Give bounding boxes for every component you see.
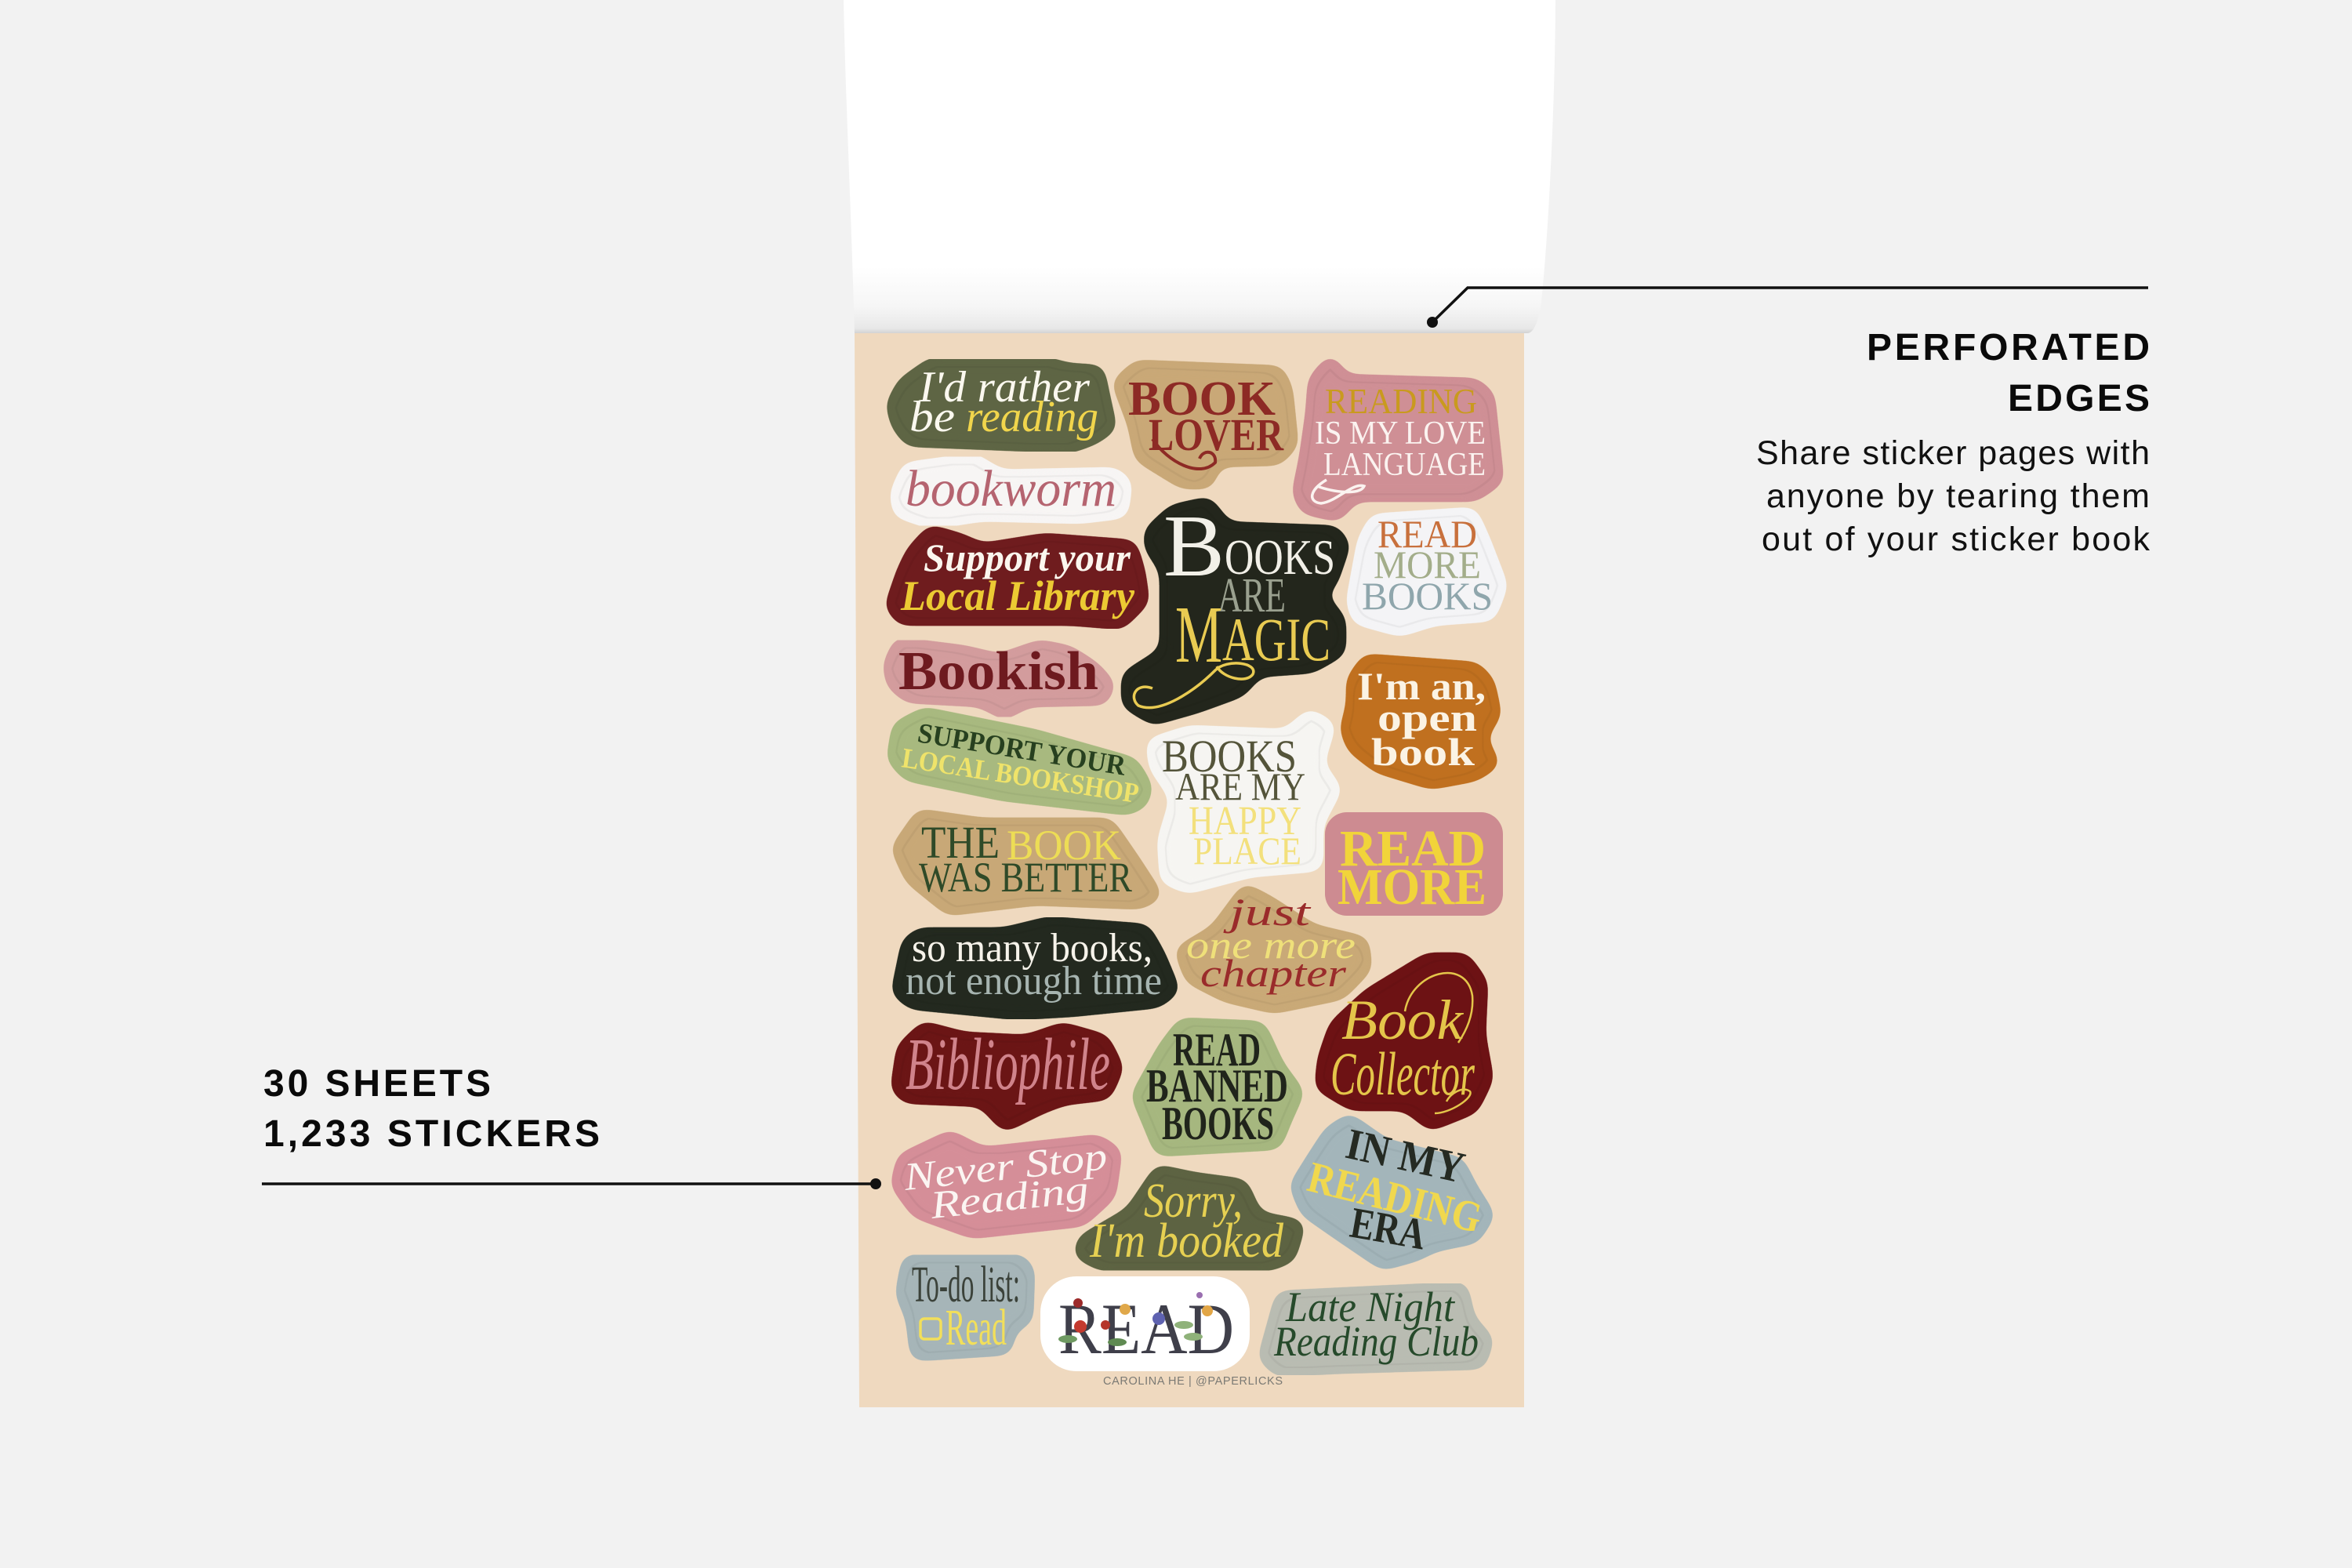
lettering bbox=[1089, 1174, 1284, 1268]
shape bbox=[1299, 1123, 1485, 1261]
lettering: READING bbox=[1303, 1152, 1486, 1243]
lettering bbox=[1146, 1024, 1288, 1149]
sticker: Late Night Reading Club bbox=[1268, 1283, 1484, 1367]
lettering: READ bbox=[1340, 820, 1486, 877]
lettering bbox=[1273, 1283, 1479, 1365]
sticker: Reading is my love language bbox=[1301, 366, 1494, 512]
lettering: IS MY LOVE bbox=[1315, 416, 1486, 452]
lettering: LANGUAGE bbox=[1323, 447, 1486, 483]
sticker: Books are magic bbox=[1131, 498, 1341, 716]
sticker: I'm an open book bbox=[1349, 663, 1492, 780]
lettering: I'm an, bbox=[1357, 664, 1486, 708]
shape bbox=[1156, 719, 1332, 884]
callout text: sheet and sticker count: 30 SHEETS bbox=[263, 1063, 491, 1105]
shape bbox=[1040, 1276, 1250, 1371]
callout text: perforated edges description: out of your sticker book bbox=[1762, 521, 2150, 558]
shape bbox=[1131, 506, 1341, 716]
lettering bbox=[1186, 890, 1356, 995]
lettering bbox=[1357, 664, 1486, 774]
lettering: so many books, bbox=[912, 926, 1152, 971]
shape bbox=[892, 647, 1105, 710]
lettering: Collector bbox=[1330, 1040, 1475, 1108]
lettering: READING bbox=[1325, 381, 1477, 421]
shape bbox=[1083, 1174, 1295, 1261]
callout text: perforated edges heading: EDGES bbox=[2008, 378, 2150, 419]
lettering: chapter bbox=[1200, 951, 1347, 995]
lettering: MORE bbox=[1374, 543, 1481, 586]
lettering: THE bbox=[921, 817, 1000, 868]
sticker: Read more bbox=[1325, 812, 1503, 916]
swash bbox=[1134, 663, 1254, 708]
lettering: To-do list: bbox=[912, 1256, 1020, 1313]
sticker: The book was better bbox=[901, 817, 1152, 906]
lettering bbox=[1315, 381, 1486, 483]
lettering bbox=[1162, 731, 1305, 873]
lettering: reading bbox=[966, 393, 1098, 441]
lettering: Read bbox=[946, 1299, 1007, 1356]
sticker sheet bbox=[855, 333, 1524, 1407]
sticker: In my reading era bbox=[1299, 1120, 1486, 1261]
callout text: perforated edges description bbox=[1756, 434, 2150, 558]
lettering: M bbox=[1175, 590, 1222, 680]
lettering: B bbox=[1163, 498, 1225, 595]
lettering bbox=[900, 717, 1141, 809]
shape bbox=[905, 1264, 1025, 1352]
callout text: perforated edges description: Share sticker pages with bbox=[1756, 434, 2150, 472]
lettering: Reading bbox=[927, 1167, 1091, 1227]
lettering: Bookish bbox=[898, 641, 1098, 702]
swash bbox=[1405, 973, 1472, 1113]
lettering: BANNED bbox=[1146, 1060, 1288, 1112]
lettering: Local Library bbox=[900, 572, 1135, 619]
torn-over white page bbox=[844, 0, 1555, 333]
lettering: ARE bbox=[1218, 569, 1286, 622]
sticker: Book Collector bbox=[1324, 962, 1484, 1121]
sticker: Read banned books bbox=[1141, 1024, 1294, 1149]
lettering: MORE bbox=[1338, 858, 1486, 916]
lettering bbox=[1128, 372, 1284, 460]
callout text: perforated edges heading bbox=[1867, 327, 2150, 419]
lettering: Sorry, bbox=[1144, 1174, 1243, 1228]
lettering: Book bbox=[1341, 989, 1465, 1051]
shape bbox=[1141, 1027, 1294, 1147]
swash bbox=[1312, 480, 1364, 503]
callout text: sheet and sticker count: 1,233 STICKERS bbox=[263, 1113, 600, 1155]
lettering: Never Stop bbox=[901, 1134, 1109, 1199]
lettering: BOOK bbox=[1128, 372, 1276, 426]
callout text: perforated edges description: anyone by tearing them bbox=[1766, 477, 2150, 515]
credit line: CAROLINA HE | @PAPERLICKS bbox=[1103, 1375, 1283, 1388]
lettering: OOKS bbox=[1225, 529, 1335, 585]
sticker: I'd rather be reading bbox=[895, 363, 1107, 444]
lettering: book bbox=[1371, 730, 1475, 774]
shape bbox=[1268, 1291, 1484, 1367]
lettering: BOOKS bbox=[1162, 1098, 1274, 1149]
flowers bbox=[1058, 1292, 1213, 1346]
shape bbox=[1301, 366, 1494, 512]
sticker: Books are my happy place bbox=[1156, 719, 1332, 884]
lettering: bookworm bbox=[906, 460, 1116, 517]
sticker: Never stop reading bbox=[900, 1134, 1112, 1229]
lettering: ERA bbox=[1347, 1199, 1429, 1260]
lettering: Late Night bbox=[1285, 1283, 1456, 1330]
shape bbox=[1356, 517, 1498, 627]
lettering: BOOKS bbox=[1162, 731, 1297, 782]
sticker: bookworm bbox=[899, 460, 1123, 520]
sticker: Bibliophile bbox=[900, 1024, 1114, 1122]
lettering bbox=[912, 1256, 1020, 1356]
lettering bbox=[900, 535, 1135, 619]
lettering: READ bbox=[1173, 1024, 1261, 1076]
lettering: READ bbox=[1377, 512, 1477, 556]
lettering: BOOK bbox=[1007, 822, 1121, 869]
shape bbox=[896, 717, 1143, 806]
lettering: one more bbox=[1186, 923, 1356, 967]
callout: sheet count leader bbox=[262, 1178, 881, 1189]
sticker: To-do list: Read bbox=[905, 1256, 1025, 1356]
lettering: not enough time bbox=[906, 959, 1162, 1004]
shape bbox=[899, 463, 1123, 520]
lettering: SUPPORT YOUR bbox=[916, 717, 1129, 782]
shape bbox=[895, 535, 1140, 620]
lettering bbox=[1362, 512, 1493, 618]
lettering bbox=[1163, 498, 1335, 680]
lettering: Reading Club bbox=[1273, 1318, 1479, 1365]
lettering: HAPPY bbox=[1189, 799, 1301, 844]
lettering bbox=[1338, 820, 1486, 916]
shape bbox=[1122, 369, 1289, 480]
shape bbox=[900, 1031, 1114, 1122]
shape bbox=[895, 367, 1107, 444]
sticker: Book Lover bbox=[1122, 369, 1289, 480]
sticker: Sorry, I'm booked bbox=[1083, 1174, 1295, 1268]
sticker: Support your local bookshop bbox=[896, 717, 1143, 809]
sticker: Support your Local Library bbox=[895, 535, 1140, 620]
shape bbox=[900, 1140, 1112, 1229]
lettering bbox=[1330, 989, 1475, 1108]
shape bbox=[901, 926, 1170, 1011]
sticker: Just one more chapter bbox=[1185, 890, 1363, 1004]
lettering bbox=[1303, 1120, 1486, 1260]
lettering bbox=[909, 363, 1098, 441]
lettering: Bibliophile bbox=[906, 1024, 1110, 1105]
sticker: Read more books bbox=[1356, 512, 1498, 627]
lettering: BOOKS bbox=[1362, 574, 1493, 618]
sticker: Bookish bbox=[892, 641, 1105, 710]
lettering: Support your bbox=[924, 535, 1131, 579]
lettering: ARE MY bbox=[1175, 764, 1305, 808]
shape bbox=[1325, 812, 1503, 916]
sticker: floral READ bbox=[1040, 1276, 1250, 1371]
lettering: IN MY bbox=[1341, 1120, 1469, 1193]
lettering bbox=[906, 926, 1162, 1004]
lettering: LOVER bbox=[1149, 409, 1284, 460]
lettering: be bbox=[909, 393, 955, 441]
lettering: I'd rather bbox=[918, 363, 1090, 412]
shape bbox=[901, 818, 1152, 906]
lettering: AGIC bbox=[1222, 605, 1330, 673]
swash bbox=[1152, 439, 1215, 469]
callout text: sheet and sticker count bbox=[263, 1063, 600, 1155]
shape bbox=[1349, 663, 1492, 780]
lettering: open bbox=[1377, 695, 1477, 739]
checkbox icon bbox=[920, 1319, 941, 1339]
callout: perforated edges leader bbox=[1427, 288, 2148, 328]
lettering bbox=[901, 1134, 1109, 1227]
lettering: PLACE bbox=[1193, 829, 1301, 873]
lettering: READ bbox=[1058, 1289, 1234, 1369]
lettering: WAS BETTER bbox=[919, 854, 1132, 901]
shape bbox=[1324, 962, 1484, 1121]
lettering bbox=[919, 817, 1132, 901]
lettering: just bbox=[1222, 890, 1312, 934]
callout text: perforated edges heading: PERFORATED bbox=[1867, 327, 2150, 368]
lettering: I'm booked bbox=[1089, 1214, 1284, 1268]
lettering: LOCAL BOOKSHOP bbox=[900, 742, 1141, 809]
shape bbox=[1185, 894, 1363, 1004]
sticker: So many books, not enough time bbox=[901, 926, 1170, 1011]
